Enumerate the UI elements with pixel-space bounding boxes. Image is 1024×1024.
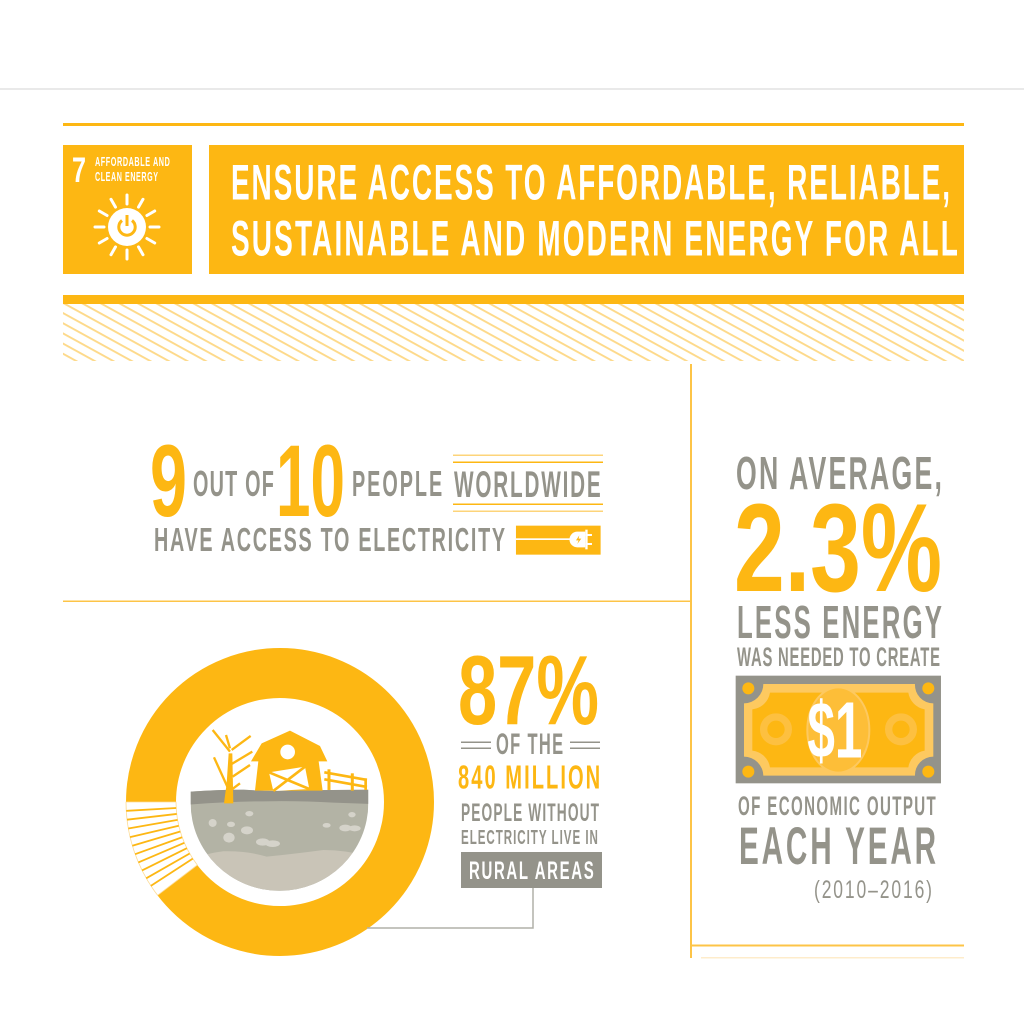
text: of the: OF THE <box>496 728 563 761</box>
label: rural areas: RURAL AREAS <box>469 857 594 885</box>
panel: title banner <box>209 145 964 274</box>
text: have access to electricity: HAVE ACCESS TO ELECTRICITY <box>154 521 505 558</box>
text: people without electricity live in <box>461 800 600 849</box>
text: people without electricity live in: ELECTRICITY LIVE IN <box>461 827 598 849</box>
icon: one dollar bill: $1 <box>807 685 862 774</box>
tree <box>213 730 252 803</box>
goal name: AFFORDABLE AND <box>95 156 170 170</box>
panel: 9 out of 10 statistic <box>150 424 603 558</box>
title: SUSTAINABLE AND MODERN ENERGY FOR ALL <box>231 210 958 267</box>
donut chart <box>126 673 409 931</box>
big number 9: 9 <box>150 424 187 538</box>
text: on average: ON AVERAGE, <box>736 447 942 499</box>
big number 87%: 87% <box>458 635 599 745</box>
text: people: PEOPLE <box>352 465 442 505</box>
goal name <box>95 156 170 185</box>
big number 2.3%: 2.3% <box>734 479 942 618</box>
title: ENSURE ACCESS TO AFFORDABLE, RELIABLE, <box>231 154 950 211</box>
hatched 13% segment <box>126 802 197 895</box>
barn <box>251 731 327 791</box>
fence <box>324 769 367 791</box>
text: people without electricity live in: PEOPLE WITHOUT <box>461 800 600 827</box>
panel: energy intensity statistic <box>734 447 942 904</box>
illustration: barn, tree and dry land <box>187 730 373 897</box>
text: out of: OUT OF <box>193 465 274 505</box>
panel: goal 7 badge <box>63 145 192 274</box>
goal name: CLEAN ENERGY <box>95 171 158 185</box>
text: of the <box>461 728 600 761</box>
panel: rural electricity donut chart <box>126 673 533 931</box>
stones <box>209 811 361 847</box>
text: of economic output: OF ECONOMIC OUTPUT <box>738 790 936 821</box>
icon: one dollar bill <box>736 676 941 783</box>
text: date range: (2010–2016) <box>814 875 932 904</box>
text: each year: EACH YEAR <box>739 817 936 876</box>
icon: electric plug <box>516 526 601 555</box>
goal number: 7 <box>72 151 86 190</box>
connector line <box>367 888 533 928</box>
text: 840 million: 840 MILLION <box>458 758 600 796</box>
title <box>231 154 958 267</box>
big number 10: 10 <box>276 424 345 538</box>
label: rural areas <box>461 852 602 888</box>
ground layers <box>190 790 368 891</box>
text: was needed to create: WAS NEEDED TO CREATE <box>737 643 940 672</box>
icon: sun with power symbol <box>95 195 159 259</box>
text: worldwide with rules: WORLDWIDE <box>454 465 601 506</box>
text: less energy: LESS ENERGY <box>737 596 942 648</box>
panel: 87 percent text <box>458 635 602 888</box>
